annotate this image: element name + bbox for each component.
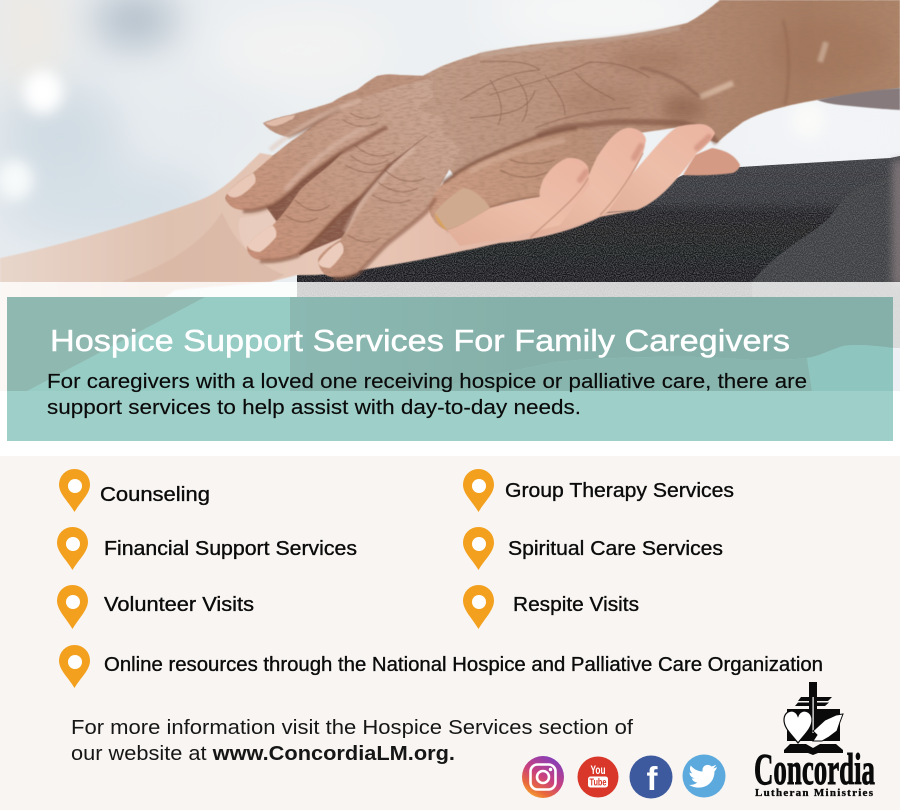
logo tagline: Lutheran Ministries bbox=[755, 787, 874, 799]
footer text bbox=[71, 717, 633, 765]
icon: Facebook: f bbox=[646, 760, 658, 797]
finger A bbox=[447, 158, 590, 246]
title: Hospice Support Services For Family Caregivers bbox=[50, 323, 790, 358]
younger finger, far right bbox=[683, 148, 740, 175]
list item: Online resources bbox=[59, 645, 823, 688]
younger arm and palm bbox=[0, 148, 740, 297]
intro text: For caregivers with a loved one receiving hospice or palliative care, there are bbox=[47, 370, 807, 393]
list item: Volunteer Visits: Volunteer Visits bbox=[104, 594, 254, 616]
list item: Counseling bbox=[59, 469, 210, 512]
vein and knuckle wrinkles bbox=[285, 61, 650, 242]
list item: Respite Visits: Respite Visits bbox=[513, 594, 639, 616]
logo: Concordia Lutheran Ministries bbox=[754, 682, 875, 799]
photo: elderly hand holding a younger hand bbox=[0, 0, 900, 391]
faded lower band of photo bbox=[0, 282, 900, 391]
list item: Online resources: Online resources through the National Hospice and Palliative Care Organization bbox=[104, 654, 823, 676]
finger 4 bbox=[318, 127, 460, 277]
younger fingers in front bbox=[447, 124, 715, 246]
list item: Spiritual Care Services: Spiritual Care Services bbox=[508, 538, 723, 560]
footer text: our website at www.ConcordiaLM.org. bbox=[71, 743, 455, 765]
separating lines between younger fingers bbox=[530, 153, 643, 238]
icon: Facebook bbox=[630, 756, 672, 798]
list item: Spiritual Care Services bbox=[463, 527, 723, 570]
fingernails bbox=[227, 115, 490, 268]
footer text: For more information visit the Hospice Services section of bbox=[71, 717, 633, 739]
shaded patches on hand bbox=[569, 41, 830, 129]
shadows between fingers bbox=[266, 135, 428, 256]
right cloth edge bbox=[892, 160, 900, 285]
list item: Financial Support Services: Financial Support Services bbox=[104, 538, 357, 560]
icon: YouTube: Tube bbox=[590, 778, 607, 788]
lower page background bbox=[0, 456, 900, 810]
logo emblem bbox=[784, 682, 843, 755]
cloth fold bbox=[752, 192, 900, 348]
finger C bbox=[600, 124, 715, 213]
icon: Instagram bbox=[522, 756, 564, 798]
finger B bbox=[570, 128, 646, 216]
finger 2 bbox=[225, 78, 433, 210]
list item: Respite Visits bbox=[463, 585, 639, 629]
light and shadow on the hand bbox=[243, 20, 826, 278]
fingertip shading bbox=[580, 137, 709, 180]
elderly hand bbox=[225, 0, 900, 277]
intro text: support services to help assist with day-to-day needs. bbox=[47, 396, 581, 419]
teal title panel bbox=[7, 297, 893, 441]
list item: Financial Support Services bbox=[57, 527, 357, 570]
list item: Group Therapy Services bbox=[463, 469, 734, 512]
finger 3 bbox=[247, 107, 447, 260]
thumb bbox=[429, 161, 596, 230]
dark cloth bbox=[297, 156, 900, 297]
icon: YouTube: You bbox=[590, 763, 606, 777]
arm and back of hand bbox=[417, 0, 900, 176]
intro text bbox=[47, 370, 807, 419]
list item: Group Therapy Services: Group Therapy Services bbox=[505, 480, 734, 502]
finger 1 (behind) bbox=[263, 74, 432, 137]
sleeve bbox=[817, 88, 900, 110]
list item: Volunteer Visits bbox=[57, 585, 254, 629]
icon: YouTube bbox=[578, 756, 618, 798]
icon: Twitter bbox=[682, 754, 726, 798]
list item: Counseling: Counseling bbox=[100, 484, 210, 506]
